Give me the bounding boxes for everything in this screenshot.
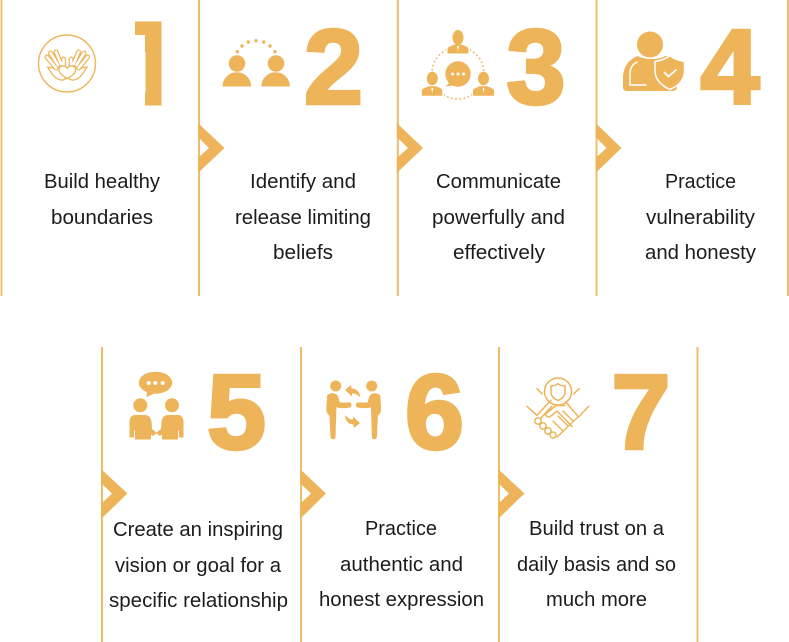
arrow chevron 7 <box>498 469 524 519</box>
step 2 text: beliefs <box>273 242 333 264</box>
arrow chevron 5 <box>101 469 128 519</box>
number 5: 5 <box>207 354 266 472</box>
arrow chevron 2 <box>198 123 224 173</box>
arrow chevron 4 <box>596 123 622 173</box>
step 5 text <box>109 519 288 612</box>
step 1 text: boundaries <box>51 207 153 229</box>
step 2 text: release limiting <box>235 207 371 229</box>
step 6 text: Practice <box>365 518 437 540</box>
icon: two people exchanging <box>326 380 381 439</box>
step 1 text: Build healthy <box>44 171 160 193</box>
number 3: 3 <box>507 8 565 126</box>
step 7 text: Build trust on a <box>529 518 665 540</box>
step 6 <box>300 354 484 611</box>
step 4 text <box>645 171 756 264</box>
step 5 text: Create an inspiring <box>113 519 283 541</box>
step 7 text: much more <box>546 589 647 611</box>
icon: handshake with shield <box>527 378 589 438</box>
step 3 text: effectively <box>453 242 545 264</box>
step 2 text: Identify and <box>250 171 356 193</box>
step 7 <box>498 354 676 611</box>
step 7 text: daily basis and so <box>517 554 676 576</box>
step 1 <box>38 22 162 224</box>
step 6 text: authentic and <box>340 554 463 576</box>
step 6 text: honest expression <box>319 589 484 611</box>
step 3 <box>397 8 565 264</box>
icon: two people talking <box>130 372 184 440</box>
step 3 text: Communicate <box>436 171 561 193</box>
step 4 <box>596 8 760 264</box>
step 5 text: vision or goal for a <box>115 555 282 577</box>
number 7: 7 <box>612 354 670 472</box>
number 1: 1 <box>123 10 181 128</box>
number 1 <box>135 22 162 106</box>
step 6 text <box>319 518 484 611</box>
icon: person with shield <box>623 32 684 91</box>
step 5 text: specific relationship <box>109 590 288 612</box>
step 3 text: powerfully and <box>432 207 565 229</box>
icon: hands holding heart <box>38 35 96 92</box>
number 2: 2 <box>304 8 363 126</box>
step 2 text <box>235 171 371 264</box>
step 4 text: and honesty <box>645 242 756 264</box>
arrow chevron 6 <box>300 469 326 519</box>
step 4 text: vulnerability <box>646 207 755 229</box>
arrow chevron 3 <box>397 123 423 173</box>
icon: team communicating <box>420 30 496 99</box>
step 7 text <box>517 518 676 611</box>
step 3 text <box>432 171 565 264</box>
icon: two people with arc <box>222 39 290 86</box>
step 5 <box>101 354 288 612</box>
step 1 text <box>44 171 160 229</box>
step 4 text: Practice <box>665 171 736 193</box>
number 6: 6 <box>405 354 464 472</box>
step 2 <box>198 8 371 264</box>
number 4: 4 <box>701 8 760 126</box>
